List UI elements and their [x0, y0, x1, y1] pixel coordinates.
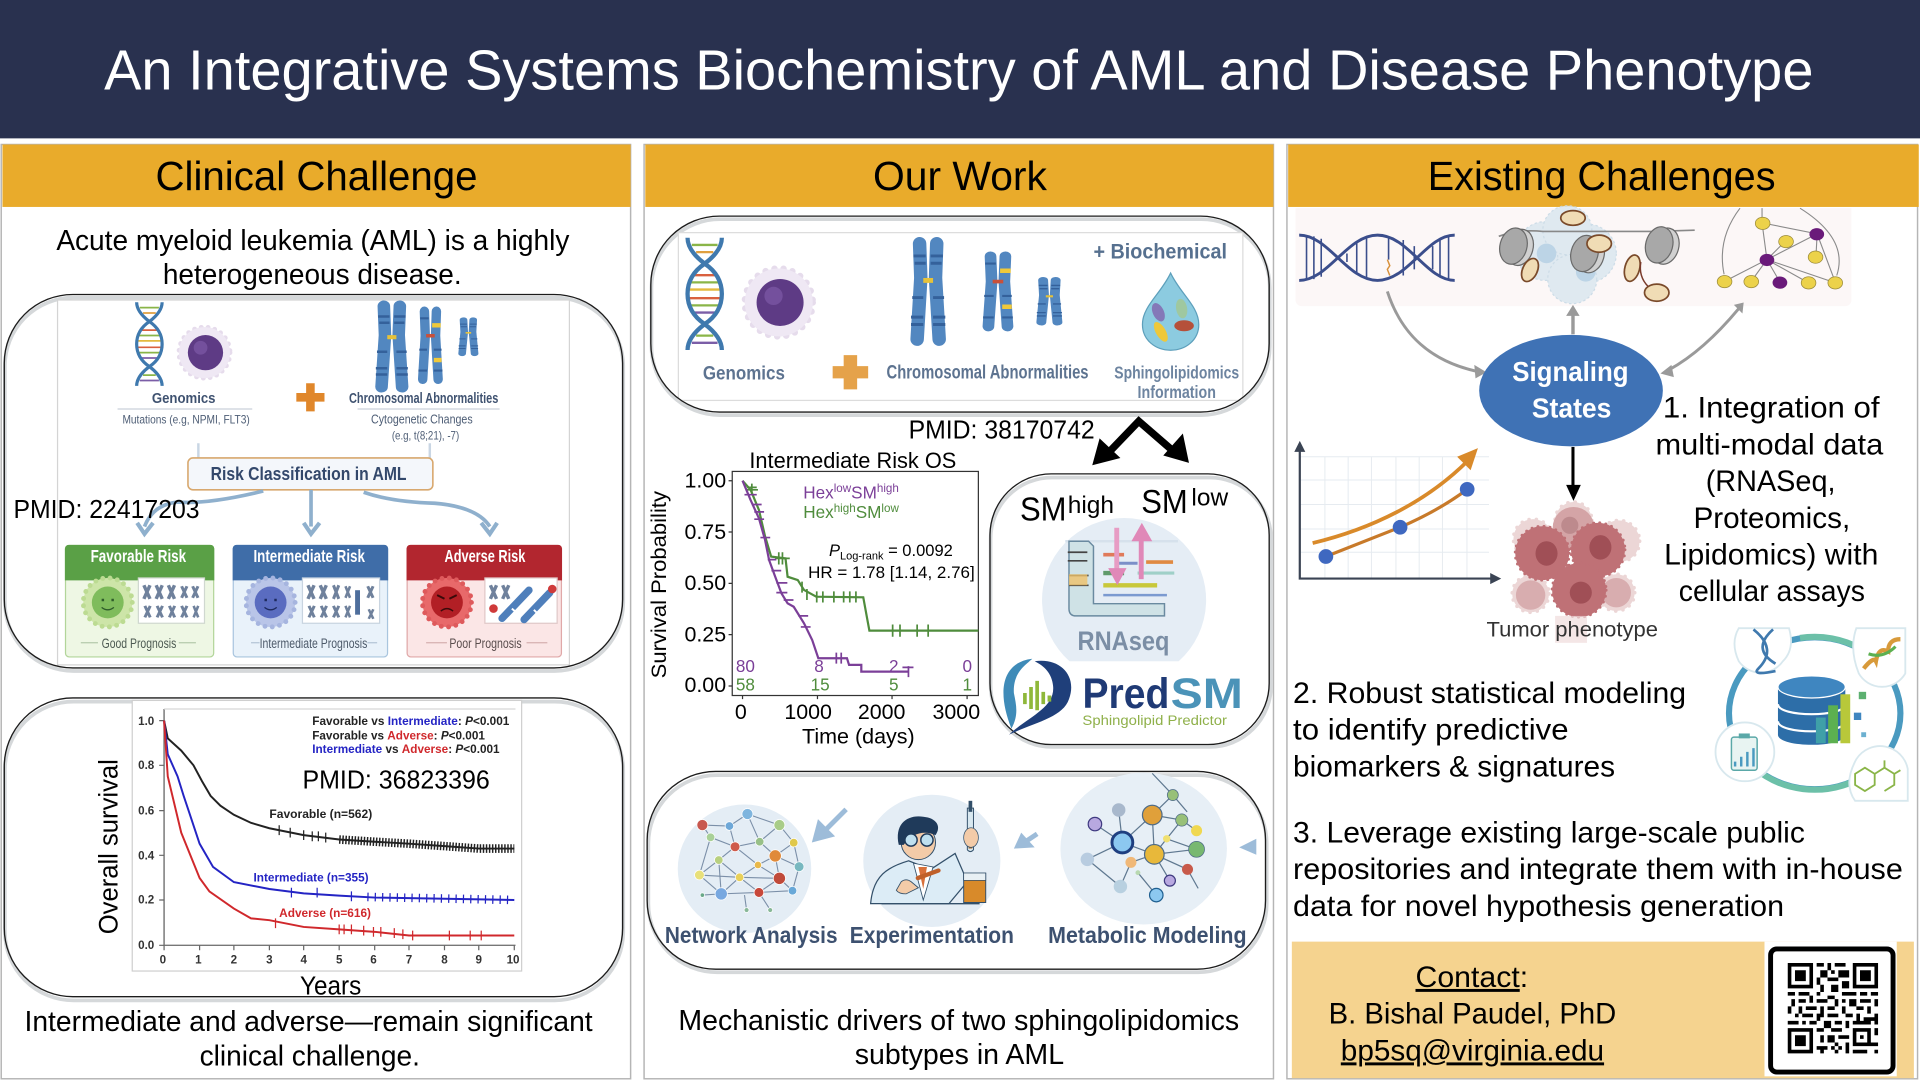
text: point 1: Proteomics, — [1693, 502, 1850, 535]
card: favorable risk: Favorable Risk — [91, 546, 186, 566]
chart axes: 5 — [336, 954, 343, 967]
chart axes — [138, 709, 520, 967]
icon: metabolic modeling — [1060, 773, 1227, 924]
contact text: bp5sq@virginia.edu — [1341, 1034, 1604, 1067]
number at risk: 80 — [736, 656, 755, 676]
contact box — [1292, 942, 1914, 1078]
conclusion text: clinical challenge. — [200, 1040, 420, 1072]
contact text — [1329, 961, 1616, 1067]
legend: Hex — [803, 482, 834, 502]
curve: Hex low SM high — [743, 481, 913, 677]
figure: risk classification — [4, 294, 623, 671]
figure: analysis workflow — [647, 771, 1267, 972]
contact text: Contact: — [1416, 961, 1528, 994]
chart axes: 0.6 — [138, 804, 155, 817]
panel: clinical challenge — [1, 144, 631, 1079]
legend: low — [834, 482, 852, 495]
node: signaling states — [1479, 335, 1663, 446]
legend — [803, 482, 899, 522]
chart axes: 0 — [160, 954, 166, 967]
axis labels: 0.25 — [684, 623, 726, 647]
label: chromosomal abnormalities: (e.g, t(8;21), -7) — [392, 430, 459, 443]
text: point 1: 1. Integration of — [1663, 392, 1880, 425]
axis labels: 0.50 — [684, 571, 726, 595]
label: sphingolipidomics information: Sphingolipidomics — [1114, 362, 1239, 382]
label: sphingolipidomics information: Information — [1138, 382, 1216, 402]
text: point 1: multi-modal data — [1656, 428, 1884, 461]
chart axes: 7 — [406, 954, 412, 967]
legend: low — [881, 502, 899, 515]
icon: database ring — [1716, 628, 1908, 801]
card: favorable risk: Good Prognosis — [102, 636, 177, 651]
statistics — [808, 541, 975, 582]
figure: overall survival curves — [4, 698, 623, 1000]
risk classification box — [188, 458, 433, 490]
curve: intermediate — [164, 721, 514, 901]
chart axes: 1.0 — [138, 715, 154, 728]
panel: existing challenges — [1287, 144, 1919, 1079]
label: biochemical: + Biochemical — [1093, 239, 1227, 263]
statistics: Log-rank — [840, 551, 884, 563]
axis labels: Survival Probability — [647, 491, 671, 678]
axis labels — [647, 468, 980, 748]
label: SM high: high — [1068, 492, 1114, 519]
heading: clinical challenge: Clinical Challenge — [156, 153, 478, 199]
logo: PredSM: SM — [1171, 670, 1243, 718]
icon: chromatin on cells — [1496, 206, 1695, 304]
label: SM low: SM — [1141, 484, 1188, 521]
text: point 3: 3. Leverage existing large-scale public — [1293, 816, 1805, 849]
label: chromosomal abnormalities — [349, 391, 500, 443]
node: signaling states: States — [1532, 393, 1611, 424]
figure: SM subtypes — [990, 474, 1271, 747]
icon: chromosomes — [376, 306, 478, 387]
QR code — [1764, 942, 1897, 1076]
arrow: signaling to phenotype — [1566, 447, 1581, 501]
axis labels: 3000 — [933, 700, 980, 724]
number at risk: 1 — [962, 675, 972, 695]
chart axes: 1 — [195, 954, 202, 967]
arrow: to experimentation — [1014, 833, 1037, 849]
figure: data inputs — [651, 216, 1270, 415]
chart axes: 0.0 — [138, 939, 154, 952]
chart: trend graph — [1294, 441, 1501, 584]
y axis title: Overall survival — [94, 759, 124, 934]
curve labels: Adverse (n=616) — [279, 906, 371, 920]
icon: dna and cell — [137, 302, 230, 386]
curve labels — [253, 807, 372, 920]
legend: Hex — [803, 502, 834, 522]
label: experimentation: Experimentation — [850, 922, 1014, 948]
icon: tumor cells — [1512, 502, 1640, 643]
logo: PredSM — [1003, 659, 1243, 735]
card: adverse risk: Adverse Risk — [444, 546, 526, 566]
label: network analysis: Network Analysis — [665, 922, 838, 948]
citation: PMID 38170742: PMID: 38170742 — [909, 414, 1095, 444]
label: SM high: SM — [1020, 491, 1067, 528]
card: favorable risk — [65, 545, 214, 657]
label: chromosomal abnormalities: Chromosomal Abnormalities — [349, 391, 498, 407]
label: chromosomal abnormalities: Chromosomal Abnormalities — [887, 362, 1089, 383]
citation: PMID 22417203: PMID: 22417203 — [13, 494, 200, 524]
number at risk: 15 — [811, 675, 830, 695]
curve: adverse — [164, 721, 514, 940]
icon: scientist — [863, 795, 1000, 927]
x axis title: Years — [300, 972, 361, 1000]
text: point 2: 2. Robust statistical modeling — [1293, 677, 1686, 710]
number at risk: 2 — [889, 656, 899, 676]
legend: SM — [851, 482, 877, 502]
header banner — [0, 0, 1920, 138]
number at risk: 5 — [889, 675, 899, 695]
arrows: omics to signaling — [1387, 291, 1744, 378]
subtype text: subtypes in AML — [855, 1039, 1064, 1071]
icon: orange plus — [296, 383, 324, 411]
chart legend p-values — [312, 714, 510, 756]
chart axes: 6 — [370, 954, 377, 967]
heading: existing challenges: Existing Challenges — [1428, 153, 1776, 199]
text: point 3 — [1293, 816, 1903, 923]
intro text: Acute myeloid leukemia (AML) is a highly — [56, 225, 570, 257]
curve labels: Favorable (n=562) — [269, 807, 372, 821]
chart title: Intermediate Risk OS — [749, 448, 956, 473]
intro text: heterogeneous disease. — [163, 259, 462, 291]
arrow: split into subtypes — [1092, 421, 1189, 465]
text: point 2 — [1293, 677, 1686, 783]
icon: RNAseq — [1042, 518, 1206, 661]
chart axes: 8 — [441, 954, 448, 967]
chart legend p-values: Intermediate vs Adverse: P<0.001 — [312, 742, 500, 756]
label: genomics: Genomics — [703, 363, 785, 385]
subtype text — [678, 1005, 1239, 1071]
label: metabolic modeling: Metabolic Modeling — [1048, 922, 1247, 948]
label: genomics: Genomics — [152, 391, 216, 407]
chart axes: 4 — [300, 954, 307, 967]
label: sphingolipidomics information — [1114, 362, 1239, 402]
chart axes: 3 — [266, 954, 273, 967]
chart axes: 9 — [476, 954, 483, 967]
chart axes: 0.4 — [138, 850, 155, 863]
label: SM low: low — [1191, 485, 1228, 512]
axis labels: 0 — [735, 700, 747, 724]
axis labels: 1000 — [784, 700, 832, 724]
logo: PredSM: Pred — [1082, 670, 1169, 718]
number at risk: 8 — [814, 656, 824, 676]
panel: our work — [644, 144, 1273, 1079]
axis labels: 0.75 — [684, 520, 726, 544]
arrow: from metabolic modeling — [1239, 839, 1256, 855]
number at risk — [736, 656, 972, 695]
number at risk: 58 — [736, 675, 755, 695]
label: tumor phenotype: Tumor phenotype — [1487, 619, 1658, 642]
card: adverse risk — [407, 545, 562, 657]
card: intermediate risk: Intermediate Risk — [253, 546, 365, 566]
icon: network analysis — [678, 804, 811, 933]
intro text — [56, 225, 570, 291]
legend: SM — [856, 502, 881, 522]
text: point 2: biomarkers & signatures — [1293, 750, 1615, 783]
legend: high — [877, 482, 899, 495]
arrow: to network analysis — [812, 809, 846, 842]
icon: chromosomes — [911, 244, 1062, 339]
label: chromosomal abnormalities: Cytogenetic Changes — [371, 412, 473, 427]
icon: lipid droplet — [1142, 273, 1199, 350]
title: An Integrative Systems Biochemistry of AML and Disease Phenotype — [104, 38, 1813, 101]
curve: Hex high SM low — [743, 481, 978, 637]
subtype text: Mechanistic drivers of two sphingolipidomics — [678, 1005, 1239, 1037]
statistics: = 0.0092 — [883, 541, 953, 560]
citation: PMID 36823396: PMID: 36823396 — [302, 765, 490, 795]
text: point 3: repositories and integrate them with in-house — [1293, 853, 1903, 886]
contact text: B. Bishal Paudel, PhD — [1329, 998, 1616, 1031]
text: point 1 — [1656, 392, 1884, 608]
curve labels: Intermediate (n=355) — [253, 871, 369, 885]
chart: intermediate risk overall survival — [647, 448, 980, 748]
chart legend p-values: Favorable vs Adverse: P<0.001 — [312, 729, 485, 743]
node: signaling states: Signaling — [1512, 356, 1629, 387]
text: point 3: data for novel hypothesis generation — [1293, 890, 1784, 923]
text: point 2: to identify predictive — [1293, 714, 1569, 747]
label: genomics: Mutations (e.g, NPMI, FLT3) — [122, 413, 250, 427]
statistics: P — [829, 541, 840, 560]
risk classification box: Risk Classification in AML — [211, 463, 407, 484]
text: point 1: (RNASeq, — [1706, 465, 1836, 498]
legend: high — [834, 502, 856, 515]
icon: RNAseq: RNAseq — [1078, 626, 1169, 656]
chart axes: 10 — [507, 954, 520, 967]
icon: orange plus — [833, 355, 868, 389]
chart axes: 0.8 — [138, 759, 155, 772]
arrows to risk groups — [137, 490, 497, 534]
text: point 1: Lipidomics) with — [1664, 538, 1878, 571]
curve: favorable — [164, 721, 514, 849]
logo: PredSM: Sphingolipid Predictor — [1082, 712, 1227, 728]
chart axes: 2 — [231, 954, 237, 967]
card: adverse risk: Poor Prognosis — [449, 636, 522, 651]
icon: dna and cell — [688, 238, 813, 350]
label: genomics — [118, 391, 252, 427]
number at risk: 0 — [962, 656, 972, 676]
card: intermediate risk — [233, 545, 388, 657]
card: intermediate risk: Intermediate Prognosis — [260, 636, 368, 651]
icon: DNA helix — [1299, 235, 1455, 280]
conclusion text — [24, 1006, 593, 1072]
axis labels: Time (days) — [802, 724, 915, 748]
chart legend p-values: Favorable vs Intermediate: P<0.001 — [312, 714, 510, 728]
heading: our work: Our Work — [873, 153, 1048, 199]
axis labels: 1.00 — [684, 468, 726, 492]
axis labels: 2000 — [858, 700, 906, 724]
statistics: HR = 1.78 [1.14, 2.76] — [808, 563, 975, 582]
axis labels: 0.00 — [684, 673, 726, 697]
icon: signaling network — [1717, 208, 1843, 289]
text: point 1: cellular assays — [1679, 575, 1865, 608]
conclusion text: Intermediate and adverse—remain significant — [24, 1006, 593, 1038]
figure: multi-omics band — [1296, 206, 1851, 306]
chart axes: 0.2 — [138, 894, 154, 907]
